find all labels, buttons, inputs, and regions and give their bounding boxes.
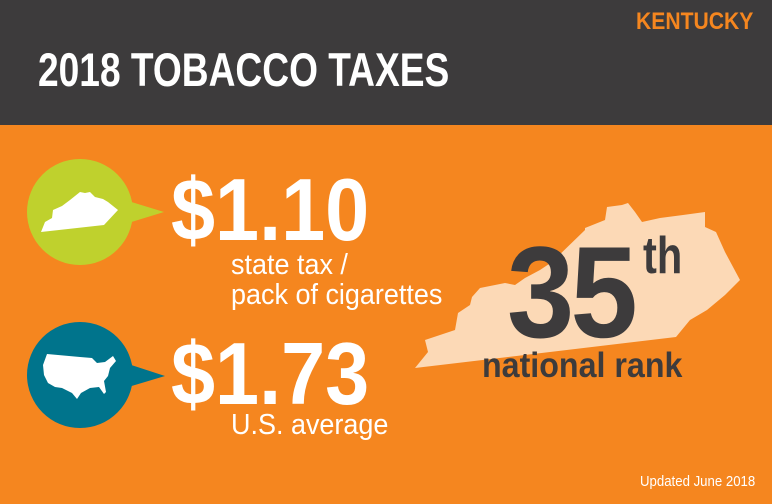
icon: US bubble xyxy=(27,322,165,428)
footer note: Updated June 2018 xyxy=(640,473,755,490)
text: state tax label xyxy=(231,249,442,311)
text: US average label: U.S. average xyxy=(231,409,388,441)
header bar xyxy=(0,0,772,125)
rank label: national rank xyxy=(482,346,682,385)
rank number: 35 xyxy=(507,219,634,365)
icon: state bubble xyxy=(27,159,164,265)
value: US average: $1.73 xyxy=(171,324,369,423)
text: state tax label: pack of cigarettes xyxy=(231,279,442,311)
title: 2018 TOBACCO TAXES xyxy=(38,43,449,96)
text: state tax label: state tax / xyxy=(231,249,348,281)
state label: KENTUCKY xyxy=(636,8,753,35)
value: state tax: $1.10 xyxy=(171,160,369,259)
rank suffix: th xyxy=(643,227,682,285)
